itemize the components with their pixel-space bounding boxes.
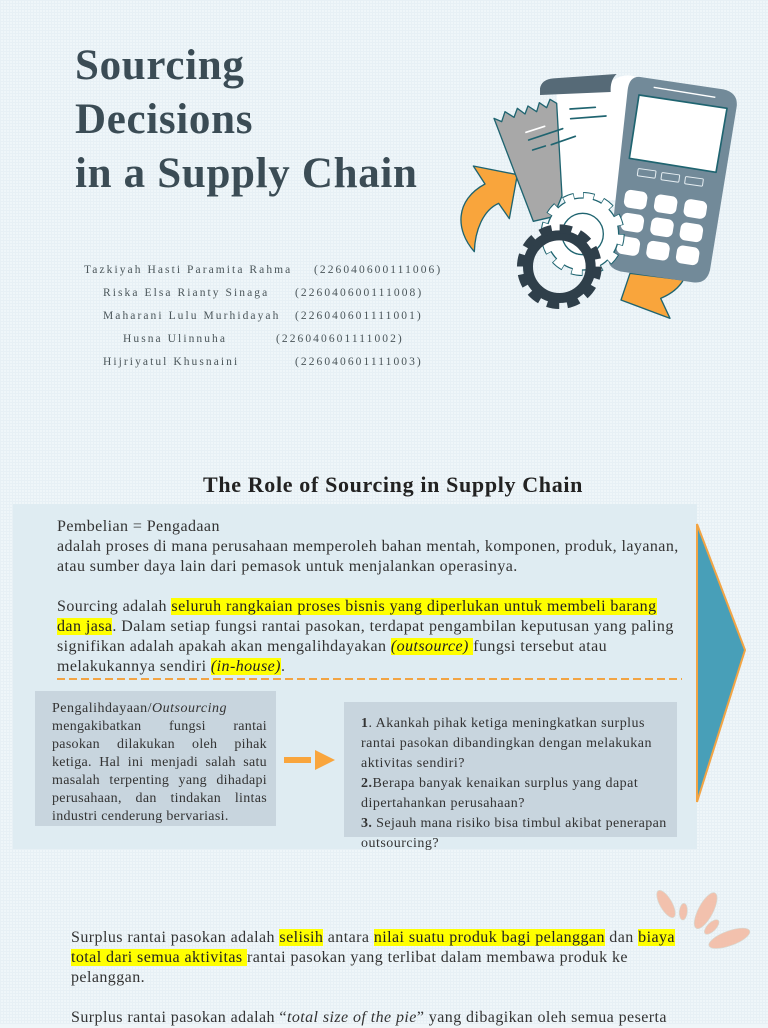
title: Sourcing: [75, 42, 245, 89]
icon: receipt lines: [526, 107, 606, 150]
text: questions: 2.Berapa banyak kenaikan surplus yang dapat: [361, 776, 638, 791]
section heading: The Role of Sourcing in Supply Chain: [203, 472, 583, 497]
author list: Riska Elsa Rianty Sinaga: [103, 287, 269, 299]
author list: (226040601111002): [276, 333, 404, 345]
author 1: Tazkiyah Hasti Paramita Rahma: [84, 264, 292, 276]
text block: supply chain surplus: Surplus rantai pasokan adalah selisih antara nilai suatu produk bagi pelanggan dan biaya: [71, 929, 675, 946]
icon: calculator small keys: [637, 168, 703, 186]
text: questions: 3. Sejauh mana risiko bisa timbul akibat penerapan: [361, 816, 667, 831]
text: outsourcing: perusahaan, dan tindakan lintas: [52, 791, 267, 806]
text: questions: rantai pasokan dibandingkan dengan melakukan: [361, 736, 652, 751]
panel: outsourcing box: [35, 691, 276, 826]
author list: Hijriyatul Khusnaini: [103, 356, 239, 368]
arrow: teal triangle: [696, 524, 746, 802]
text: outsourcing: industri cenderung bervariasi.: [52, 809, 229, 824]
title: in a Supply Chain: [75, 150, 418, 197]
author list: (226040600111006): [314, 264, 442, 276]
text block: supply chain surplus: pelanggan.: [71, 969, 145, 986]
author list: (226040601111003): [295, 356, 423, 368]
icon: calculator body: [609, 78, 736, 282]
title: Decisions: [75, 96, 253, 143]
author list: Maharani Lulu Murhidayah: [103, 310, 280, 322]
text: questions: aktivitas sendiri?: [361, 756, 465, 771]
icon: orange ribbon: [621, 273, 683, 318]
icon: grey receipt: [494, 99, 562, 221]
text block: definition: atau sumber daya lain dari pemasok untuk menjalankan operasinya.: [57, 558, 518, 575]
icon: calculator screen: [629, 95, 727, 172]
text block: definition: [57, 518, 679, 675]
text: outsourcing: mengakibatkan fungsi rantai: [52, 719, 267, 734]
author list: (226040600111008): [295, 287, 423, 299]
text block: definition: Sourcing adalah seluruh rangkaian proses bisnis yang diperlukan untuk membeli barang: [57, 598, 657, 615]
text block: supply chain surplus: Surplus rantai pasokan adalah “total size of the pie” yang dibagikan oleh semua peserta: [71, 1009, 667, 1026]
icon: white gear: [545, 196, 620, 272]
illustration: receipts, calculator, gears: [460, 74, 737, 319]
text block: definition: signifikan adalah apakah akan mengalihdayakan (outsource) fungsi tersebut atau: [57, 638, 607, 655]
icon: calculator keys: [616, 189, 708, 266]
panel: role of sourcing: [13, 504, 697, 849]
text block: supply chain surplus: total dari semua aktivitas rantai pasokan yang terlibat dalam membawa produk ke: [71, 949, 628, 966]
title: [75, 42, 418, 197]
text: questions: outsourcing?: [361, 836, 439, 851]
text: outsourcing: ketiga. Hal ini menjadi salah satu: [52, 755, 267, 770]
icon: white document: [557, 75, 640, 200]
text block: definition: adalah proses di mana perusahaan memperoleh bahan mentah, komponen, produk, layanan,: [57, 538, 679, 555]
panel: questions box: [344, 702, 677, 837]
text block: definition: dan jasa. Dalam setiap fungsi rantai pasokan, terdapat pengambilan keputusan yang paling: [57, 618, 674, 635]
text: questions: dipertahankan perusahaan?: [361, 796, 525, 811]
text: outsourcing: masalah terpenting yang dihadapi: [52, 773, 267, 788]
author list: Husna Ulinnuha: [123, 333, 227, 345]
text: questions: [361, 716, 667, 851]
decoration: pink petals: [656, 890, 750, 949]
text block: definition: melakukannya sendiri (in-house).: [57, 658, 285, 675]
icon: document header: [540, 74, 617, 95]
text block: supply chain surplus: [71, 929, 675, 1026]
arrow: orange: [284, 750, 335, 770]
author list: [84, 264, 442, 368]
text: outsourcing: [52, 701, 267, 824]
icon: orange arrow left: [461, 166, 517, 252]
text block: definition: Pembelian = Pengadaan: [57, 518, 220, 535]
text: outsourcing: pasokan dilakukan oleh pihak: [52, 737, 267, 752]
text: questions: 1. Akankah pihak ketiga meningkatkan surplus: [361, 716, 645, 731]
dashed divider: [57, 678, 682, 680]
icon: dark gear: [521, 229, 597, 305]
text: outsourcing: Pengalihdayaan/Outsourcing: [52, 701, 227, 716]
author list: (226040601111001): [295, 310, 423, 322]
